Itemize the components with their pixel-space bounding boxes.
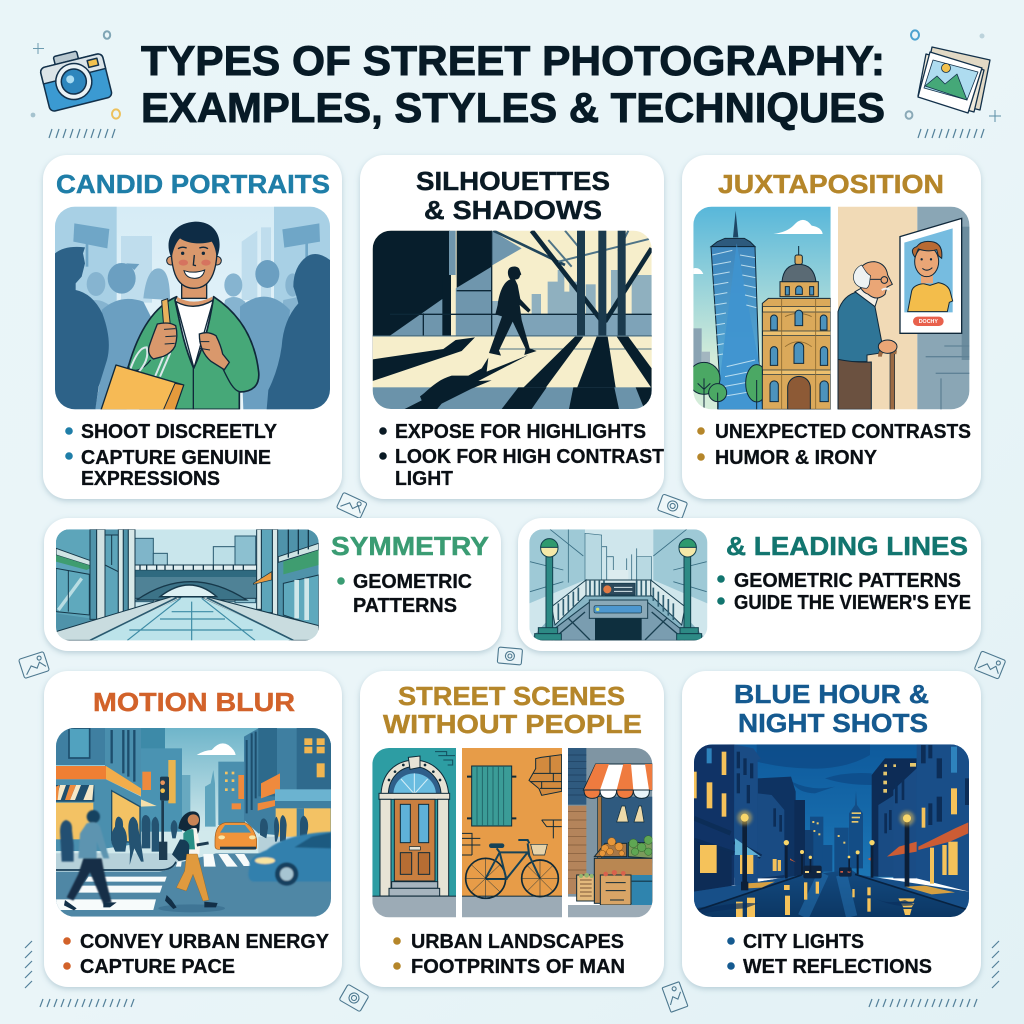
bullet list: EXPRESSIONS [81, 468, 220, 490]
card [360, 671, 664, 987]
decorative rings and sparkles top [31, 30, 1001, 122]
bullet list: WET REFLECTIONS [743, 956, 932, 978]
panel: street scenes without people [360, 671, 664, 987]
illustration: smiling man in crowd [55, 207, 331, 410]
bullet list: FOOTPRINTS OF MAN [411, 956, 625, 978]
heading [734, 679, 929, 738]
panel: candid portraits [43, 155, 342, 499]
bullet list: EXPOSE FOR HIGHLIGHTS [395, 421, 646, 443]
title [141, 37, 885, 131]
heading [383, 681, 642, 739]
bullet list [63, 931, 330, 978]
bullet list: CITY LIGHTS [743, 931, 864, 953]
bullet list [65, 421, 278, 490]
illustration: door, bicycle, market stall [372, 748, 653, 918]
card [682, 155, 981, 499]
bullet list [697, 421, 971, 469]
title: TYPES OF STREET PHOTOGRAPHY: [141, 37, 885, 84]
panel: motion blur [44, 671, 342, 987]
heading: & LEADING LINES [726, 531, 968, 561]
heading: MOTION BLUR [93, 687, 295, 717]
illustration: pedestrians at crosswalk [56, 728, 333, 917]
icon: camera [38, 45, 113, 112]
card [44, 518, 501, 651]
heading: BLUE HOUR & [734, 679, 929, 709]
heading: JUXTAPOSITION [718, 169, 944, 199]
heading: SYMMETRY [331, 531, 489, 561]
bullet list: URBAN LANDSCAPES [411, 931, 624, 953]
panel: juxtaposition [682, 155, 981, 499]
heading: STREET SCENES [398, 681, 625, 711]
bullet list: CAPTURE GENUINE [81, 447, 271, 469]
illustration: old and new contrasts: DOCHY [919, 319, 938, 325]
panel: silhouettes and shadows [360, 155, 664, 499]
bullet list: GUIDE THE VIEWER'S EYE [734, 592, 971, 614]
bullet list: UNEXPECTED CONTRASTS [715, 421, 971, 443]
heading: SILHOUETTES [416, 166, 610, 196]
bullet list: LIGHT [395, 468, 453, 490]
card [44, 671, 342, 987]
icon: photo stack [918, 47, 990, 113]
panel: symmetry [44, 518, 501, 651]
heading: CANDID PORTRAITS [56, 169, 330, 199]
heading: & SHADOWS [424, 195, 602, 225]
illustration: rainy night street [694, 744, 969, 917]
illustration: subway entrance [529, 529, 707, 640]
heading: WITHOUT PEOPLE [383, 709, 642, 739]
bullet list [337, 571, 472, 617]
bullet list: CAPTURE PACE [80, 956, 235, 978]
card [43, 155, 342, 499]
illustration: silhouette walking [373, 231, 658, 410]
bullet list: PATTERNS [353, 595, 457, 617]
panel: leading lines [518, 518, 981, 651]
bullet list [393, 931, 625, 978]
bullet list: CONVEY URBAN ENERGY [80, 931, 330, 953]
illustration: old and new contrasts [688, 207, 971, 410]
card [360, 155, 664, 499]
bullet list: GEOMETRIC [353, 571, 472, 593]
heading: NIGHT SHOTS [738, 708, 928, 738]
bullet list: SHOOT DISCREETLY [81, 421, 278, 443]
bullet list [379, 421, 664, 490]
small line icons between panels [19, 492, 1006, 1012]
panel: blue hour and night shots [682, 671, 981, 987]
bullet list: GEOMETRIC PATTERNS [734, 570, 961, 592]
bullet list [727, 931, 932, 978]
bullet list: HUMOR & IRONY [715, 447, 878, 469]
bullet list: LOOK FOR HIGH CONTRAST [395, 446, 664, 468]
title: EXAMPLES, STYLES & TECHNIQUES [141, 84, 885, 131]
card [518, 518, 981, 651]
card [682, 671, 981, 987]
bullet list [717, 570, 971, 614]
illustration: symmetric street with bridge [56, 529, 319, 640]
heading [416, 166, 610, 225]
